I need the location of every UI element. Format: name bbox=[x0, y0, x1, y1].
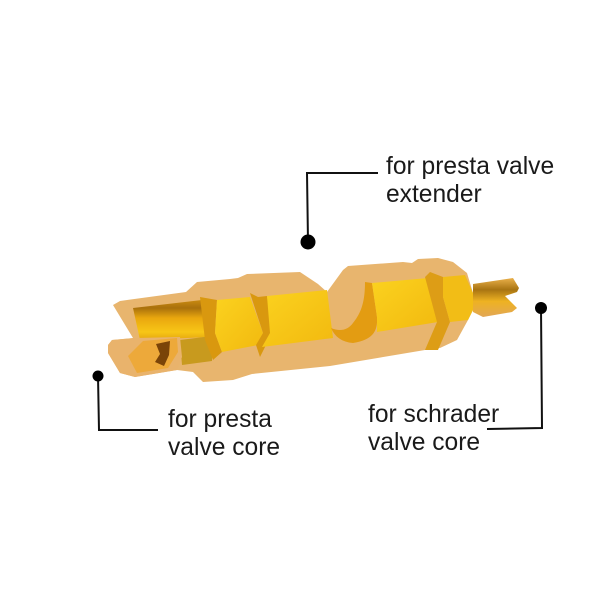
right body front face bbox=[372, 278, 438, 332]
collar edge bbox=[200, 297, 222, 360]
lower shaft section bbox=[180, 336, 212, 365]
leader line bbox=[487, 308, 542, 429]
lower prong dark interior bbox=[155, 341, 170, 366]
marker dot bbox=[92, 370, 104, 382]
lower prong opening bbox=[128, 338, 178, 373]
callout: for presta valve extender bbox=[300, 153, 554, 250]
callout: for presta valve core bbox=[92, 370, 280, 461]
callout: for schrader valve core bbox=[368, 302, 547, 456]
label: for presta valve bbox=[386, 153, 554, 180]
marker dot bbox=[300, 234, 316, 250]
marker dot bbox=[535, 302, 547, 314]
label: extender bbox=[386, 181, 482, 208]
notch inner highlight bbox=[331, 282, 377, 343]
upper prong cylinder bbox=[133, 300, 210, 340]
valve pin tip bbox=[473, 278, 519, 317]
label: valve core bbox=[168, 434, 280, 461]
end hex groove bbox=[425, 272, 450, 350]
leader line bbox=[307, 173, 378, 242]
collar front face bbox=[215, 297, 263, 352]
end hex front face bbox=[443, 275, 473, 322]
leader line bbox=[98, 376, 158, 430]
label: valve core bbox=[368, 429, 480, 456]
label: for schrader bbox=[368, 401, 499, 428]
label: for presta bbox=[168, 406, 272, 433]
middle body front face bbox=[262, 290, 333, 347]
lower prong bbox=[108, 337, 182, 377]
tool: gold valve tool bbox=[108, 258, 519, 382]
middle body groove bbox=[250, 293, 272, 357]
body silhouette bbox=[108, 258, 473, 382]
